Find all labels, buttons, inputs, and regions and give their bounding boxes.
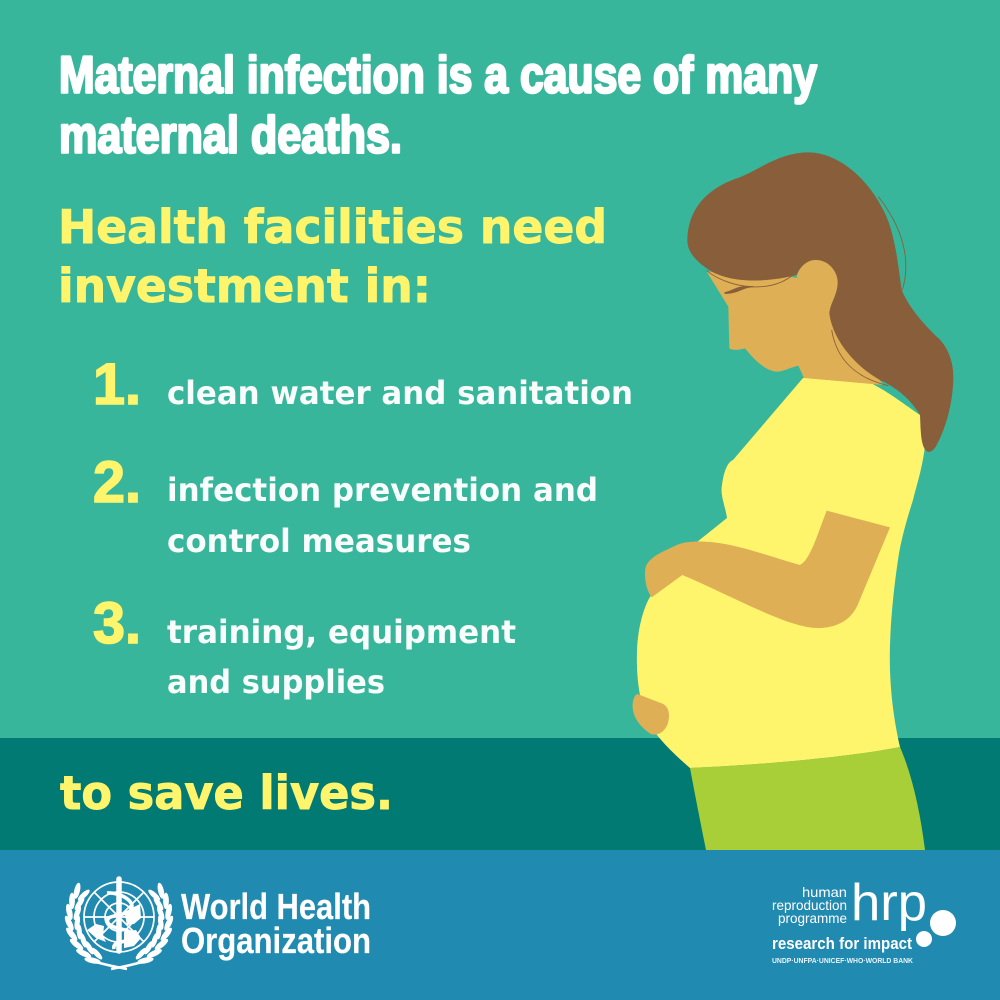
footer band (0, 850, 1000, 1000)
list item 2 (93, 450, 598, 560)
ear (797, 260, 838, 313)
list item 1 (93, 352, 633, 417)
staff (116, 879, 122, 951)
right laurel (132, 880, 175, 970)
WHO wordmark (181, 886, 371, 961)
list item 3: training, equipment (167, 613, 516, 651)
list item 1: clean water and sanitation (167, 374, 633, 412)
programme name (772, 884, 847, 926)
shirt (637, 377, 926, 768)
land masses (87, 904, 141, 948)
list item 2: control measures (167, 522, 471, 560)
title: maternal deaths. (59, 106, 402, 164)
programme name: programme (778, 910, 847, 926)
lower hand (633, 694, 669, 735)
WHO wordmark: Organization (181, 920, 371, 961)
eyelid (725, 286, 753, 293)
subheading: Health facilities need (58, 200, 607, 254)
title (59, 46, 817, 164)
list item 1: 1. (93, 352, 141, 417)
subheading (58, 200, 607, 313)
hair (687, 152, 953, 452)
hrp letters: hrp (851, 874, 927, 932)
programme name: reproduction (772, 897, 847, 913)
laurel stems (92, 961, 146, 969)
dots (916, 910, 956, 947)
arm (633, 511, 890, 735)
list item 2: 2. (93, 450, 141, 515)
programme name: human (802, 884, 847, 900)
logo: HRP (772, 874, 956, 965)
globe (84, 882, 154, 952)
background panel (0, 0, 1000, 738)
tagline: research for impact (772, 935, 912, 953)
list item 2: infection prevention and (167, 471, 598, 509)
subheading: investment in: (58, 259, 431, 313)
list item 3: and supplies (167, 663, 385, 701)
closing text: to save lives. (60, 766, 393, 820)
band: to save lives (0, 738, 1000, 850)
logo: World Health Organization (63, 879, 371, 970)
WHO emblem (63, 879, 175, 970)
neck and face (707, 272, 883, 385)
snake (107, 893, 132, 949)
head (687, 152, 953, 452)
list item 3: 3. (93, 591, 141, 656)
title: Maternal infection is a cause of many (59, 46, 817, 104)
illustration: pregnant woman (633, 152, 953, 850)
list item 3 (93, 591, 516, 701)
hair strand lines (707, 197, 906, 386)
WHO wordmark: World Health (181, 886, 371, 927)
sponsors: UNDP·UNFPA·UNICEF·WHO·WORLD BANK (772, 956, 914, 965)
left laurel (63, 880, 106, 970)
trousers (690, 747, 925, 850)
